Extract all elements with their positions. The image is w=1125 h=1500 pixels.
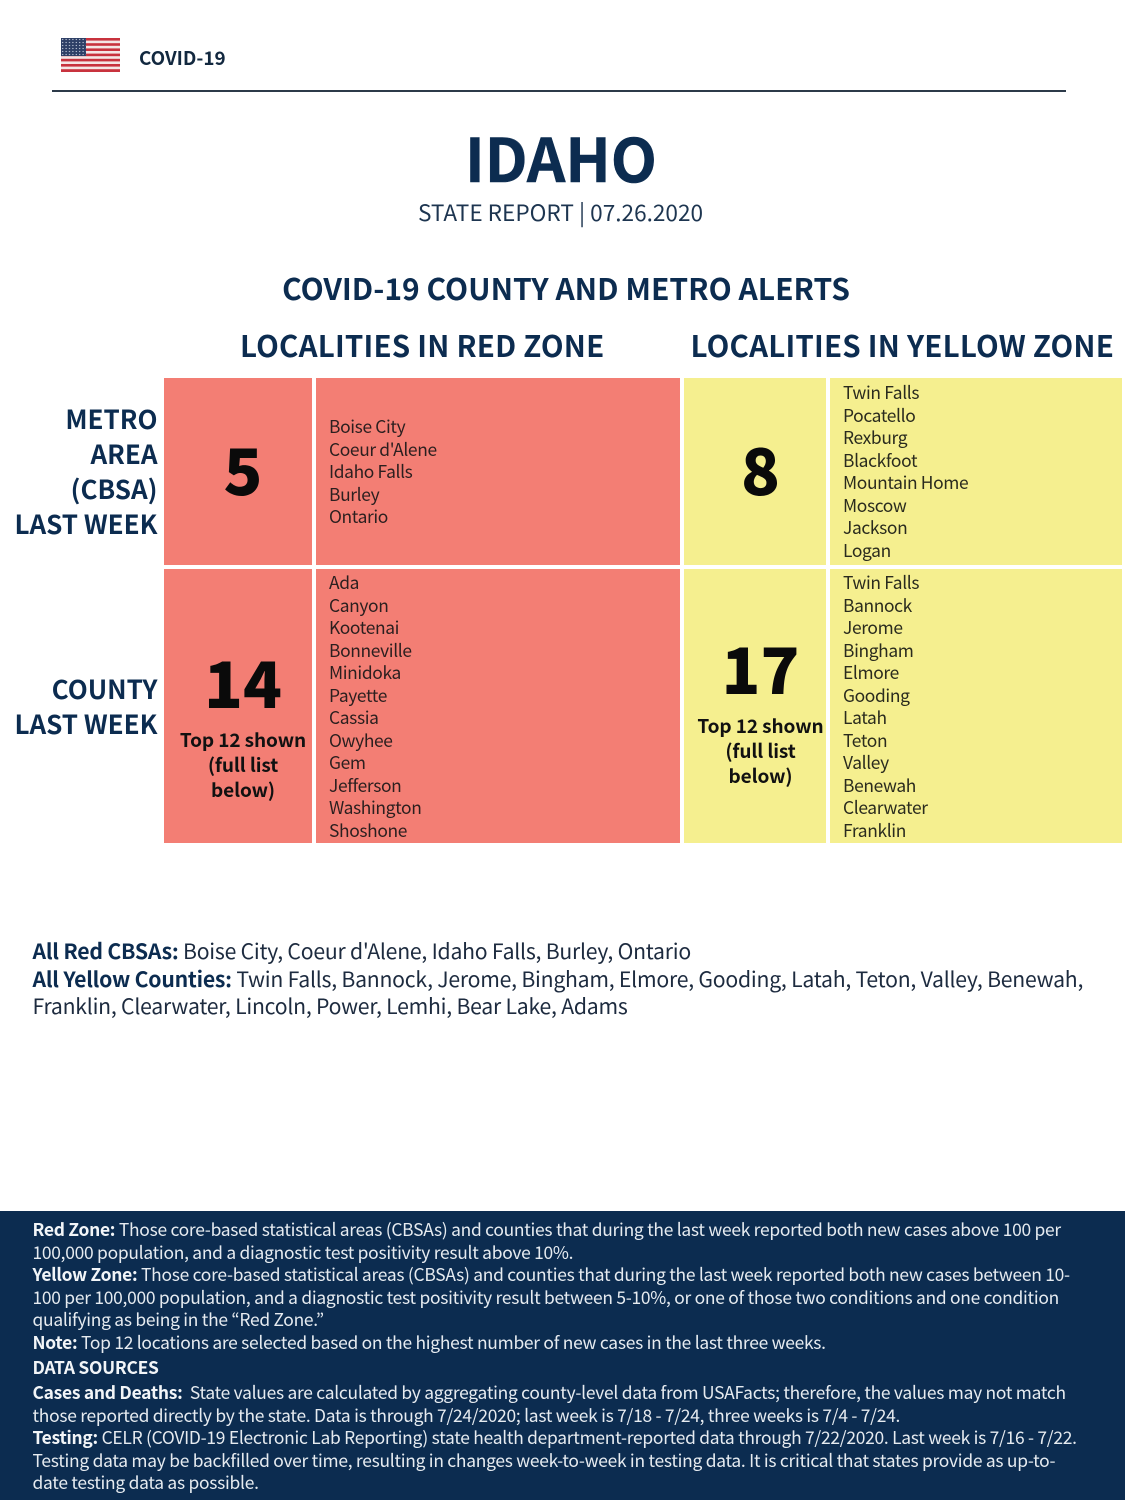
list: yellow metros: Logan: [843, 538, 891, 562]
header label: COVID-19: [139, 44, 226, 71]
panel: metro yellow count: [684, 378, 826, 565]
list: yellow metros: Pocatello: [843, 402, 915, 428]
list: yellow counties: Benewah: [843, 772, 916, 798]
list: red metros: [329, 414, 437, 529]
list: yellow metros: Jackson: [843, 515, 907, 540]
number: 14: 14: [204, 635, 282, 727]
row label: metro area: LAST WEEK: [15, 505, 158, 542]
subtitle: STATE REPORT | 07.26.2020: [418, 195, 703, 228]
note: top 12 yellow: Top 12 shown: [697, 712, 824, 739]
text block: zone definitions: Red Zone: Those core-based statistical areas (CBSAs) and counties that during the last week reported both new cases above 100 per: [32, 1217, 1061, 1242]
list: yellow metros: Rexburg: [843, 425, 907, 450]
text block: data sources: those reported directly by the state. Data is through 7/24/2020; last week is 7/18 - 7/24, three weeks is 7/4 - 7/24.: [32, 1402, 900, 1428]
list: red counties: Washington: [329, 795, 421, 820]
row label: county: COUNTY: [52, 670, 158, 707]
list: yellow metros: Blackfoot: [843, 448, 917, 472]
number: 5: 5: [224, 422, 262, 514]
panel: county yellow list: [830, 569, 1122, 843]
list: yellow counties: Latah: [843, 705, 887, 730]
list: yellow counties: Clearwater: [843, 795, 928, 820]
list: yellow metros: Twin Falls: [843, 380, 919, 405]
text block: zone definitions: qualifying as being in the “Red Zone.”: [32, 1307, 324, 1332]
row label: metro area: (CBSA): [71, 470, 158, 507]
number: 8: 8: [741, 422, 780, 514]
text block: full lists: All Yellow Counties: Twin Falls, Bannock, Jerome, Bingham, Elmore, Gooding, Latah, Teton, Valley, Benewah,: [32, 963, 1083, 994]
row label: metro area: AREA: [90, 435, 158, 472]
list: red counties: Payette: [329, 682, 387, 708]
list: yellow counties: Jerome: [843, 615, 903, 640]
text block: zone definitions: 100,000 population, and a diagnostic test positivity result above 10%.: [32, 1240, 573, 1264]
row label: metro area: METRO: [65, 400, 158, 437]
panel: metro red list: [316, 378, 680, 565]
list: red metros: Idaho Falls: [329, 459, 412, 484]
text block: zone definitions: 100 per 100,000 population, and a diagnostic test positivity result between 5-10%, or one of those two conditions and one condition: [32, 1284, 1059, 1310]
panel: county red list: [316, 569, 680, 843]
text block: zone definitions: Note: Top 12 locations are selected based on the highest number of new cases in the last three weeks.: [32, 1330, 826, 1354]
list: yellow counties: Elmore: [843, 660, 899, 685]
list: red counties: Gem: [329, 750, 366, 775]
panel: metro yellow list: [830, 378, 1122, 565]
row label: county: [15, 670, 158, 742]
panel: county red count: [164, 569, 312, 843]
number: 17: 17: [722, 621, 799, 713]
list: red counties: Kootenai: [329, 615, 399, 640]
list: yellow counties: Bannock: [843, 592, 912, 618]
text block: data sources: date testing data as possible.: [32, 1470, 259, 1495]
list: red counties: Canyon: [329, 592, 388, 618]
list: red metros: Coeur d'Alene: [329, 436, 437, 462]
note: top 12 red: below): [211, 776, 275, 803]
text block: full lists: All Red CBSAs: Boise City, Coeur d'Alene, Idaho Falls, Burley, Ontario: [32, 935, 691, 966]
list: red counties: Ada: [329, 570, 359, 595]
list: red counties: Cassia: [329, 705, 379, 730]
icon: US flag: [61, 38, 120, 72]
note: top 12 red: (full list: [208, 751, 278, 778]
text block: full lists: Franklin, Clearwater, Lincoln, Power, Lemhi, Bear Lake, Adams: [32, 990, 628, 1021]
list: red metros: Boise City: [329, 414, 405, 439]
text block: full lists: [32, 935, 1083, 1021]
text block: zone definitions: [32, 1217, 1070, 1354]
note: top 12 red: [180, 726, 306, 803]
header rule: [52, 90, 1066, 92]
text block: data sources: Testing: CELR (COVID-19 Electronic Lab Reporting) state health department-reported data through 7/22/2020. Last week is 7/16 - 7/22.: [32, 1425, 1077, 1450]
list: red counties: [329, 570, 421, 842]
panel: county yellow count: [684, 569, 826, 843]
panel: footer definitions and data sources: [0, 1211, 1125, 1500]
list: yellow metros: [843, 380, 968, 562]
note: top 12 yellow: [697, 712, 824, 789]
note: top 12 yellow: below): [728, 762, 792, 789]
note: top 12 yellow: (full list: [725, 737, 796, 764]
list: yellow counties: Teton: [843, 728, 887, 752]
list: red counties: Minidoka: [329, 660, 401, 685]
list: yellow counties: [843, 570, 928, 842]
heading: red zone: LOCALITIES IN RED ZONE: [240, 324, 604, 366]
note: top 12 red: Top 12 shown: [180, 726, 306, 753]
list: yellow counties: Twin Falls: [843, 570, 919, 595]
list: yellow metros: Mountain Home: [843, 470, 968, 495]
heading: data sources: DATA SOURCES: [32, 1355, 159, 1380]
list: red counties: Bonneville: [329, 638, 412, 662]
text block: data sources: Cases and Deaths: State values are calculated by aggregating county-level data from USAFacts; therefore, the values may not match: [32, 1380, 1066, 1405]
text block: zone definitions: Yellow Zone: Those core-based statistical areas (CBSAs) and counties that during the last week reported both new cases between 10-: [32, 1262, 1070, 1287]
list: yellow counties: Franklin: [843, 818, 906, 842]
list: red metros: Ontario: [329, 504, 388, 529]
list: yellow metros: Moscow: [843, 492, 907, 518]
row label: metro area: [15, 400, 158, 542]
row label: county: LAST WEEK: [15, 705, 158, 742]
heading: alerts: COVID-19 COUNTY AND METRO ALERTS: [282, 265, 850, 309]
list: yellow counties: Valley: [843, 750, 889, 775]
list: red counties: Jefferson: [329, 772, 401, 798]
list: red metros: Burley: [329, 482, 379, 506]
heading: yellow zone: LOCALITIES IN YELLOW ZONE: [690, 324, 1114, 366]
list: yellow counties: Bingham: [843, 638, 914, 662]
list: yellow counties: Gooding: [843, 682, 910, 708]
list: red counties: Owyhee: [329, 728, 393, 752]
text block: data sources: Testing data may be backfilled over time, resulting in changes week-to-week in testing data. It is critical that states provide as up-to-: [32, 1448, 1055, 1472]
title: IDAHO: [465, 113, 657, 200]
panel: metro red count: [164, 378, 312, 565]
list: red counties: Shoshone: [329, 818, 407, 842]
text block: data sources: [32, 1380, 1077, 1495]
